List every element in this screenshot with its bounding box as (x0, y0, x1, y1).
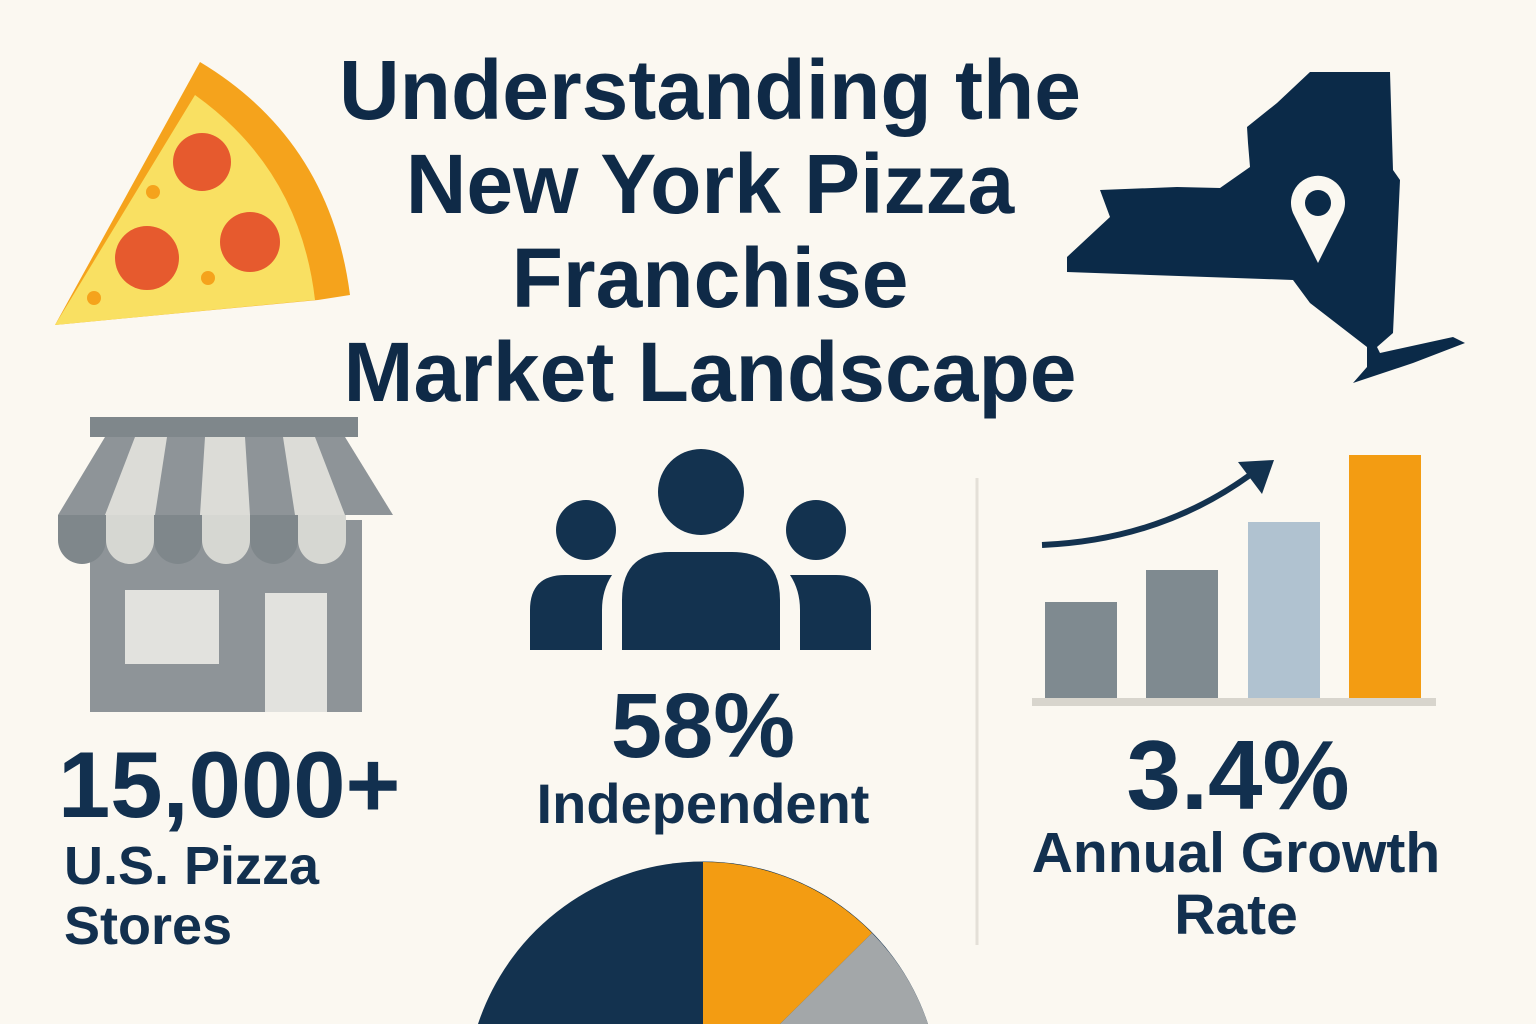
stat: 3.4%: 3.4% (1126, 720, 1350, 830)
title: Market Landscape (344, 325, 1076, 419)
title: New York Pizza (406, 137, 1014, 231)
label: Annual Growth Rate (1032, 821, 1440, 947)
label: Annual Growth Rate: Annual Growth (1032, 821, 1440, 885)
bar chart (1032, 455, 1436, 706)
label: U.S. Pizza Stores (64, 836, 320, 956)
arrow (1042, 460, 1274, 545)
label: Annual Growth Rate: Rate (1174, 883, 1298, 947)
label: Independent: Independent (537, 772, 869, 835)
icon: people (530, 449, 871, 650)
icon: New York map (1067, 72, 1465, 383)
icon: pizza slice (55, 62, 350, 325)
label: U.S. Pizza Stores: Stores (64, 896, 232, 956)
title: Franchise (512, 231, 908, 325)
icon: storefront (58, 417, 393, 712)
stat: 15,000+: 15,000+ (58, 732, 400, 837)
label: U.S. Pizza Stores: U.S. Pizza (64, 836, 319, 896)
title: Understanding the (339, 43, 1081, 137)
pie chart (478, 861, 928, 1024)
stat: 58%: 58% (611, 675, 795, 777)
title (339, 43, 1081, 419)
